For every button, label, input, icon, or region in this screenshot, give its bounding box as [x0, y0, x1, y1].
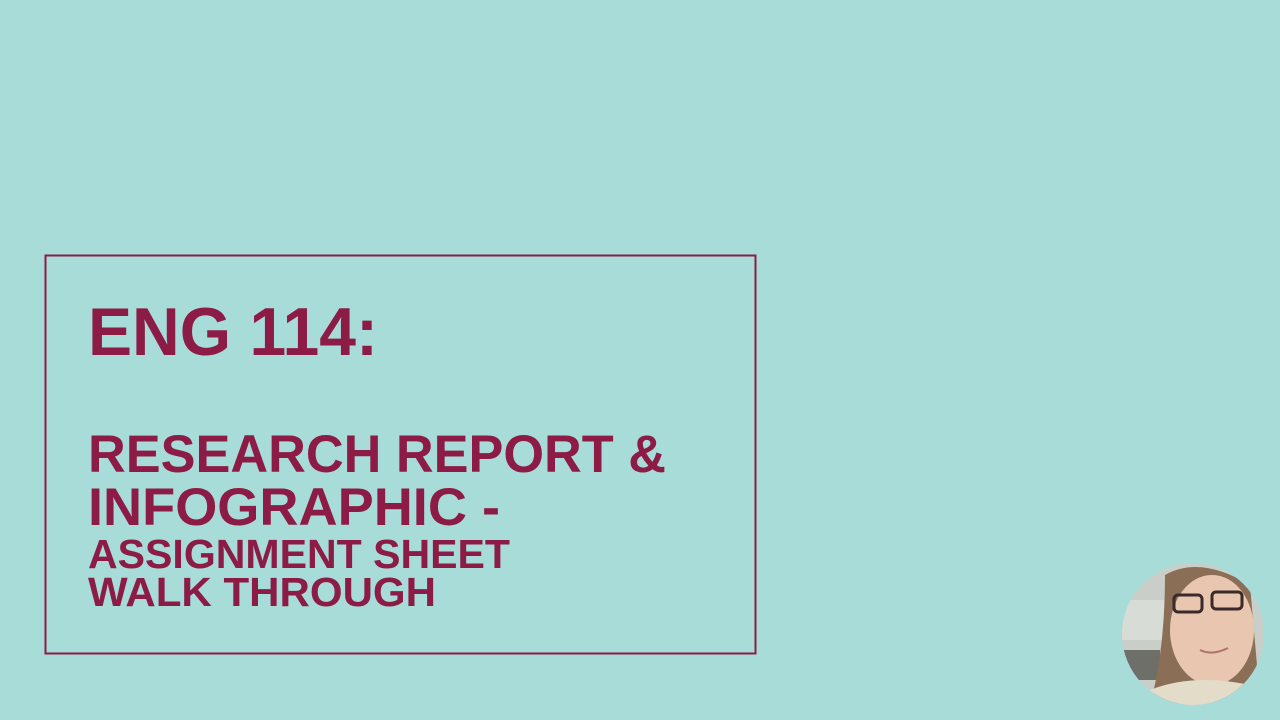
subtitle line 1: ASSIGNMENT SHEET — [88, 531, 510, 577]
panel: title frame — [46, 256, 756, 654]
icon: presenter photo — [1122, 563, 1264, 705]
heading: title line 1: RESEARCH REPORT & — [88, 425, 666, 484]
subtitle line 2: WALK THROUGH — [88, 569, 436, 615]
heading: course: ENG 114: — [88, 294, 378, 370]
heading: title line 2: INFOGRAPHIC - — [88, 478, 500, 537]
